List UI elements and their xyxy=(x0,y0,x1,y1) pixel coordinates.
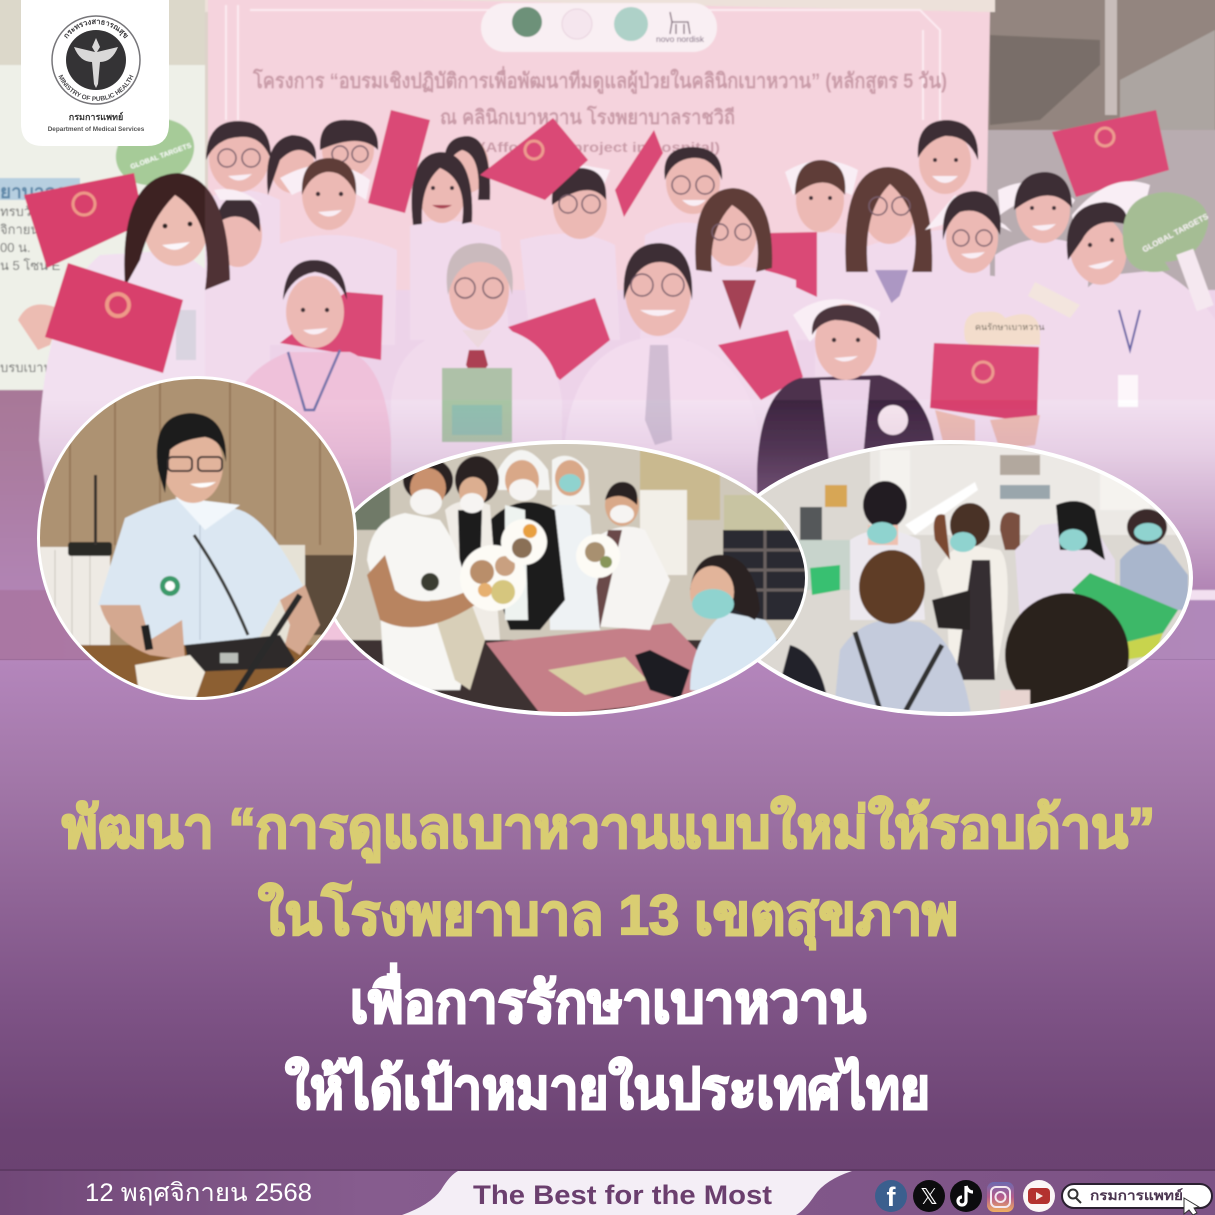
headline line 1: พัฒนา “การดูแลเบาหวานแบบใหม่ให้รอบด้าน” xyxy=(62,795,1155,863)
pink folder front right xyxy=(718,330,1039,423)
icon: X xyxy=(913,1180,945,1212)
main group photo xyxy=(0,0,1215,660)
green sign left xyxy=(106,108,204,196)
search box: กรมการแพทย์ xyxy=(1090,1188,1183,1203)
icon: facebook: f xyxy=(886,1182,896,1212)
logo card xyxy=(21,0,169,146)
left wall xyxy=(0,0,215,400)
dark shelves xyxy=(723,530,813,620)
background gradient xyxy=(0,660,1215,1215)
poster xyxy=(640,490,687,575)
banner heading text xyxy=(252,65,947,155)
doctor badge xyxy=(160,576,180,596)
back row people xyxy=(205,121,280,300)
left wall poster text xyxy=(0,182,92,375)
banner logos pill xyxy=(481,3,717,52)
ministry emblem xyxy=(51,15,141,105)
table xyxy=(80,644,314,697)
young woman floral dress xyxy=(240,260,391,640)
green sign right xyxy=(1123,192,1214,311)
doctor arms xyxy=(100,605,185,660)
photo ellipse 2: nurses with food plates xyxy=(320,440,813,720)
back figure dark hair xyxy=(1005,593,1129,717)
nurse 5 xyxy=(595,526,670,631)
pink folders back xyxy=(24,110,1169,297)
old nurse in dark suit xyxy=(757,299,934,600)
doctor shirt xyxy=(98,497,305,645)
table xyxy=(352,639,778,712)
green sign right: GLOBAL TARGETS xyxy=(1141,211,1210,254)
left wall poster text: จิกายน xyxy=(0,222,39,237)
icon: facebook xyxy=(875,1180,907,1212)
desk mic base xyxy=(68,542,112,556)
headline line 3: เพื่อการรักษาเบาหวาน xyxy=(350,963,866,1034)
banner heading text: (Affordable project in hospital) xyxy=(480,139,720,155)
logo card: Department of Medical Services xyxy=(48,126,145,133)
slogan: The Best for the Most xyxy=(473,1180,772,1210)
grey haired doctor xyxy=(280,243,610,600)
right nurse with sign xyxy=(1045,181,1215,600)
icon: youtube xyxy=(1023,1180,1055,1212)
banner heading text: โครงการ “อบรมเชิงปฏิบัติการเพื่อพัฒนาทีมดูแลผู้ป่วยในคลินิกเบาหวาน” (หลักสูตร 5 วัน) xyxy=(252,65,947,95)
headline line 4: ให้ได้เป้าหมายในประเทศไทย xyxy=(285,1056,930,1120)
left wall poster text: ยาบาลราช xyxy=(0,182,90,203)
nurse 1 xyxy=(367,513,470,690)
cursor xyxy=(1184,1198,1199,1215)
footer bar xyxy=(0,1169,1215,1215)
green basket xyxy=(1072,573,1178,643)
sash label xyxy=(1028,282,1080,318)
icon: tiktok xyxy=(950,1180,982,1212)
slogan ribbon xyxy=(402,1171,852,1215)
left woman with folder xyxy=(18,173,236,600)
left wall poster text: ทรบวัน xyxy=(0,204,40,219)
microphone console xyxy=(185,635,295,672)
green sign left: GLOBAL TARGETS xyxy=(130,142,193,171)
banner logos pill: novo nordisk xyxy=(656,35,705,44)
coats backdrop xyxy=(225,290,1215,600)
seated and standing staff xyxy=(850,530,925,620)
heart sign: คนรักษาเบาหวาน xyxy=(975,322,1044,332)
nurse 3 black cardigan xyxy=(490,502,565,630)
woman 2 xyxy=(445,501,500,640)
back figure curly hair xyxy=(836,620,971,712)
pink photo tint xyxy=(205,0,1215,400)
banner heading text: ณ คลินิกเบาหวาน โรงพยาบาลราชวิถี xyxy=(440,105,735,129)
purple fade over photo xyxy=(0,400,1215,590)
headline xyxy=(62,795,1155,1120)
left wall poster text: บรบเบาหวานมัก xyxy=(0,360,92,375)
hands and folder holders xyxy=(935,410,1040,450)
banner frame xyxy=(226,5,940,120)
ministry emblem: กระทรวงสาธารณสุข xyxy=(64,19,128,39)
icon: X: 𝕏 xyxy=(920,1184,938,1209)
search box xyxy=(1062,1184,1212,1215)
nurse 4 xyxy=(548,504,600,630)
tissue box xyxy=(135,655,205,700)
left wall poster text: 00 น. xyxy=(0,240,31,255)
doctor head xyxy=(165,436,224,504)
cream top strip xyxy=(205,0,995,12)
headline line 2: ในโรงพยาบาล 13 เขตสุขภาพ xyxy=(258,882,958,950)
food plates xyxy=(460,545,526,611)
pink folder front left xyxy=(45,263,183,373)
mid row people xyxy=(265,158,397,345)
department name: กรมการแพทย์ xyxy=(69,111,123,122)
ministry emblem: MINISTRY OF PUBLIC HEALTH xyxy=(58,74,134,101)
date: 12 พฤศจิกายน 2568 xyxy=(85,1179,312,1207)
icon: instagram xyxy=(987,1182,1014,1212)
left wall poster text: น 5 โซน E xyxy=(0,258,61,273)
photo ellipse 3: pharmacy group xyxy=(758,440,1193,716)
heart sign xyxy=(964,312,1044,345)
right wall window xyxy=(985,0,1215,130)
photo circle 1: doctor at microphone xyxy=(37,376,357,700)
table cloth xyxy=(40,547,110,647)
pink banner xyxy=(208,0,990,300)
seated woman xyxy=(635,650,690,700)
center man xyxy=(565,243,760,640)
